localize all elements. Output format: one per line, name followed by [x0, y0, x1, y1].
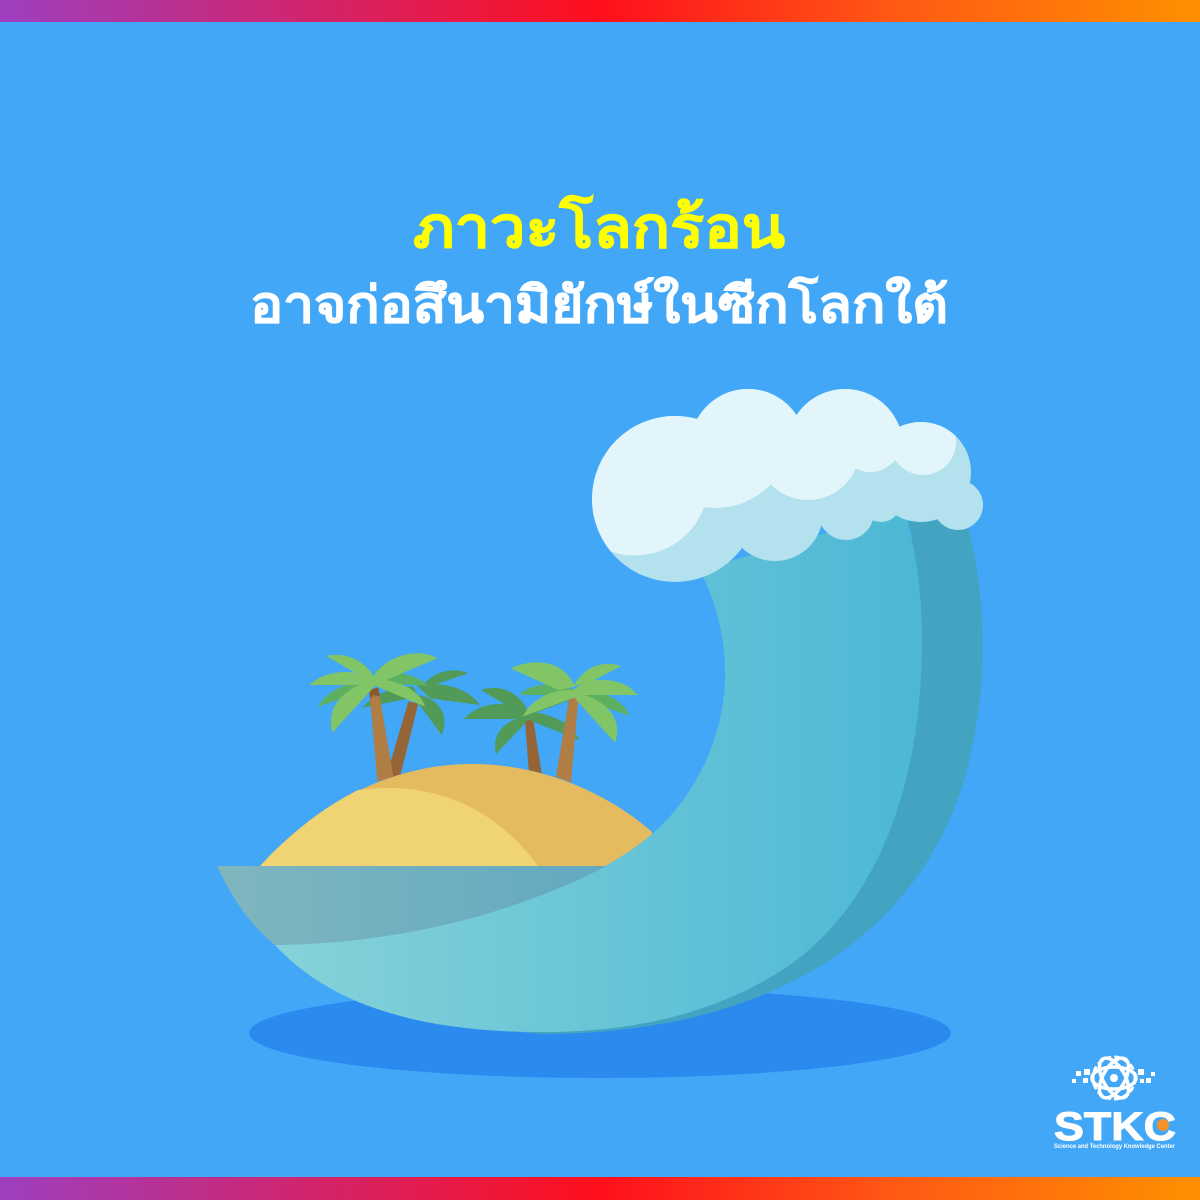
palm tree: front right — [511, 662, 638, 783]
STKC logo — [1054, 1053, 1176, 1150]
title line: yellow headline: ภาวะโลกร้อน — [413, 193, 785, 260]
title — [250, 193, 948, 333]
title line: white subtitle: อาจก่อสึนามิยักษ์ในซีกโลกใต้ — [250, 275, 948, 333]
palm tree: back right — [464, 688, 579, 773]
wave body — [275, 510, 922, 1032]
logo pixel squares — [1072, 1069, 1155, 1083]
wave shadow ellipse — [249, 988, 951, 1078]
logo wordmark: STKC — [1054, 1105, 1176, 1149]
logo atom icon — [1092, 1053, 1136, 1103]
foam: shadow layer — [592, 389, 983, 582]
tsunami wave — [217, 352, 983, 1034]
sand hill: dark — [260, 764, 652, 866]
top gradient bar — [0, 0, 1200, 22]
island with palm trees — [260, 653, 652, 866]
palm tree: front left — [309, 653, 437, 782]
wave back shade — [500, 505, 983, 1034]
bottom gradient bar — [0, 1177, 1200, 1200]
logo tagline: Science and Technology Knowledge Center — [1054, 1144, 1176, 1150]
palm tree: back left — [363, 670, 480, 778]
wave front water — [217, 866, 607, 945]
palm trees — [309, 653, 638, 783]
foam: highlight layer — [592, 389, 956, 556]
sand hill: light — [260, 788, 538, 866]
logo orange dot — [1157, 1119, 1169, 1131]
